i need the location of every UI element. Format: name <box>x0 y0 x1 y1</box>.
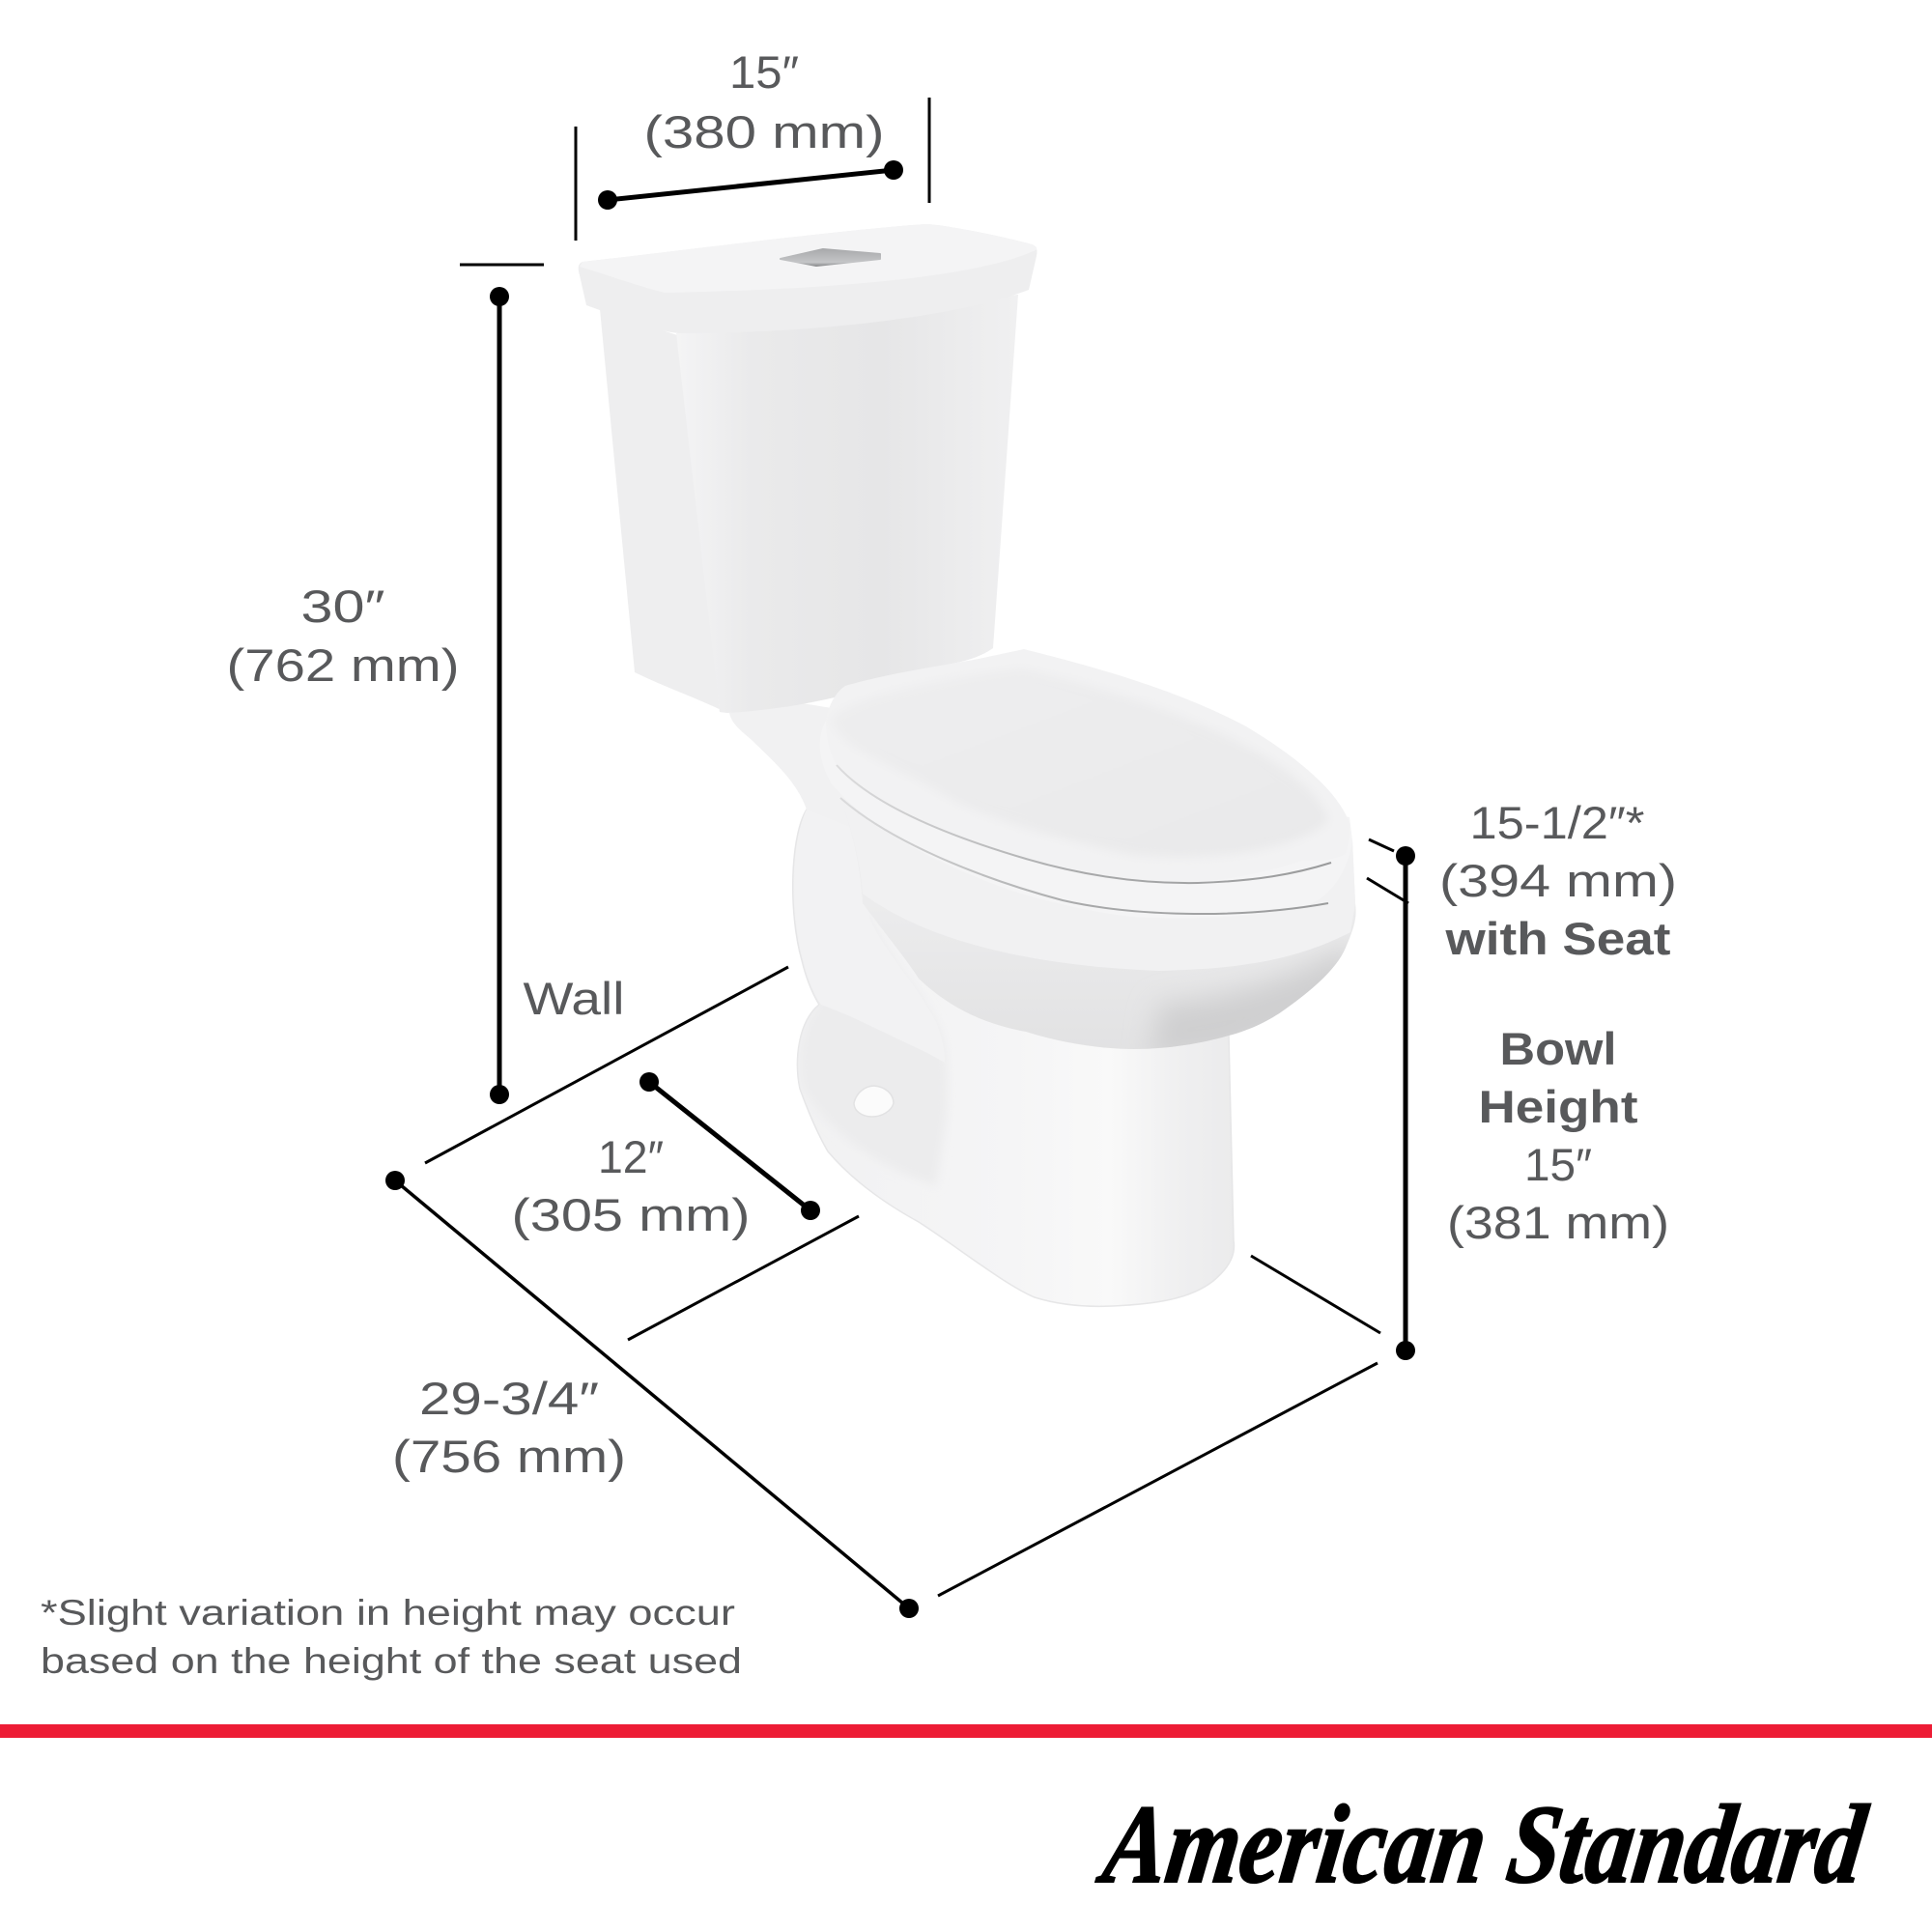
dimension: rough-in 12 in: (305 mm) <box>512 1189 750 1240</box>
toilet: bowl <box>821 756 1356 1049</box>
dimension: total height 30 in: (762 mm) <box>226 639 460 691</box>
dimension: bowl height <box>1251 797 1677 1360</box>
dimension: bowl height: Bowl <box>1499 1023 1617 1074</box>
dimension: total height 30 in: 30″ <box>301 581 384 632</box>
label: wall: Wall <box>524 973 624 1024</box>
dimension: depth 29-3/4 in <box>385 1171 1378 1618</box>
toilet: rear bowl lobe <box>795 773 945 1063</box>
dimension: bowl height: Height <box>1478 1081 1638 1132</box>
toilet: tank lid top surface <box>580 224 1037 293</box>
toilet: neck <box>729 703 874 831</box>
toilet: bowl pedestal <box>793 810 1234 1306</box>
toilet: cover shadow line <box>837 765 1331 883</box>
footnote <box>41 1593 742 1681</box>
dimension: tank width 15 in: 15″ <box>729 46 799 98</box>
dimension: rough-in 12 in <box>425 967 859 1340</box>
toilet: tank lid <box>579 224 1037 333</box>
dimension: bowl height: (394 mm) <box>1439 855 1677 906</box>
toilet: tank front body <box>676 295 1018 713</box>
toilet: seat cover <box>826 649 1350 883</box>
dimension: bowl height: (381 mm) <box>1447 1197 1669 1248</box>
dimension: bowl height: with Seat <box>1444 913 1671 964</box>
dimension: depth 29-3/4 in: 29-3/4″ <box>419 1373 599 1424</box>
toilet: trapway recess <box>800 850 948 1186</box>
dimension: tank width 15 in: (380 mm) <box>643 106 885 157</box>
dimension: bowl height: 15″ <box>1524 1139 1592 1190</box>
footnote: *Slight variation in height may occur <box>41 1593 735 1633</box>
toilet: bolt cap <box>854 1086 894 1117</box>
toilet: rim band <box>821 756 1355 971</box>
dimension: total height 30 in <box>226 265 544 1104</box>
toilet: bowl shadow <box>1151 948 1345 1048</box>
toilet: seat shadow line <box>840 798 1328 914</box>
toilet: tank left face <box>600 309 727 713</box>
dimension: rough-in 12 in: 12″ <box>598 1131 664 1182</box>
toilet <box>579 224 1356 1306</box>
toilet: flush button <box>781 249 880 266</box>
dimension: tank width 15 in <box>576 46 929 241</box>
red divider bar <box>0 1724 1932 1738</box>
dimension: depth 29-3/4 in: (756 mm) <box>392 1431 626 1482</box>
dimension: bowl height: 15-1/2″* <box>1470 797 1644 848</box>
toilet: seat <box>820 721 1352 918</box>
toilet: cover inner panel <box>831 668 1328 857</box>
footnote: based on the height of the seat used <box>41 1641 742 1681</box>
